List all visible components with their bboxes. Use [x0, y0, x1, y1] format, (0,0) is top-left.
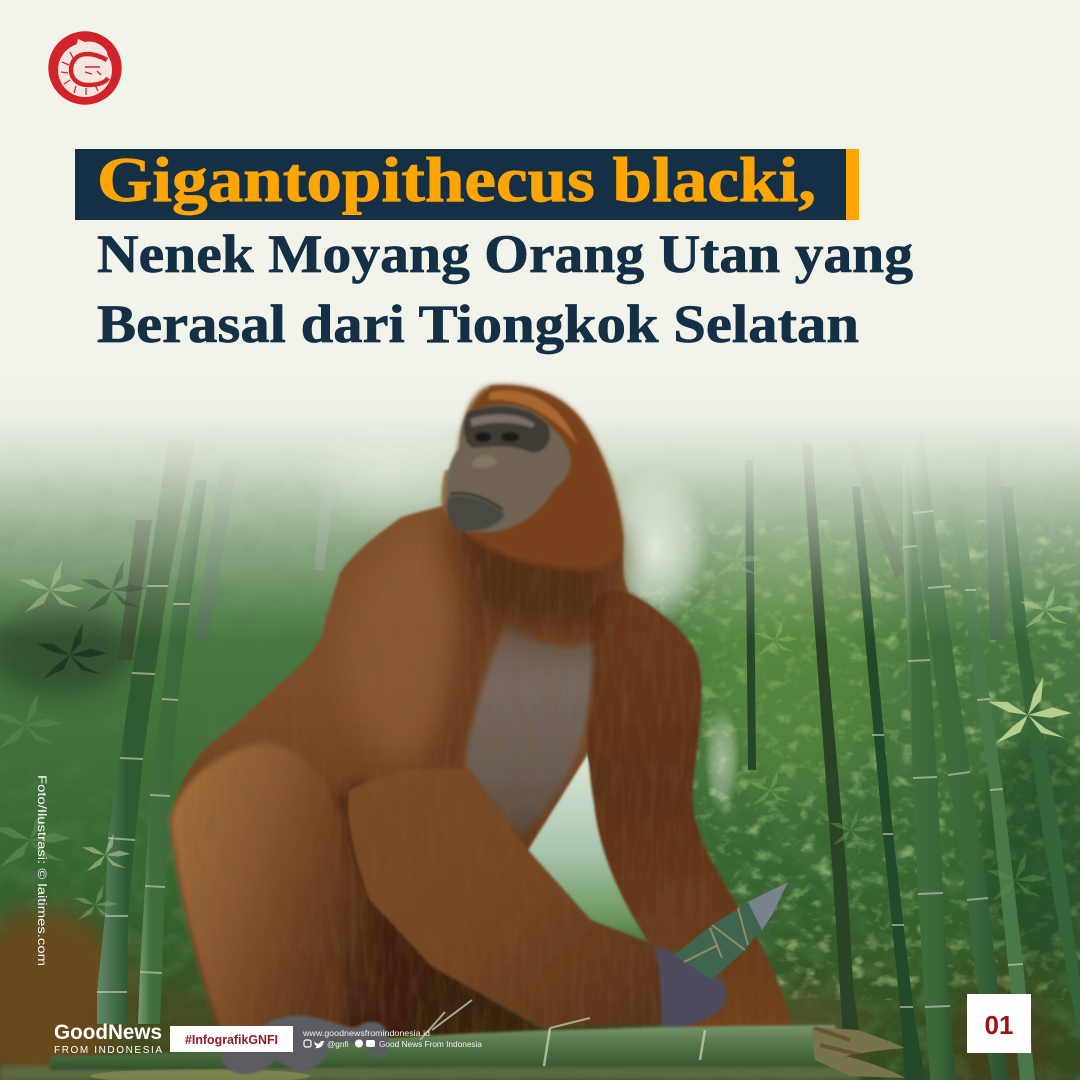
title: species name: Gigantopithecus blacki,: [97, 145, 816, 215]
brand: GoodNews From Indonesia: [54, 1021, 162, 1056]
icon: instagram: [304, 1040, 311, 1047]
ape foot: [222, 1016, 389, 1074]
ape body: [170, 385, 628, 1040]
ape hair fringe left of face: [441, 470, 470, 535]
logo ring: [58, 43, 112, 97]
ape head hair: [457, 385, 622, 570]
hashtag label: #InfografikGNFI: [185, 1032, 278, 1047]
horizontal bamboo and ground: [0, 1000, 905, 1080]
page number: [967, 994, 1031, 1053]
bamboo leaves: [0, 536, 1073, 920]
logo eagle head: [76, 39, 108, 59]
under-forearm shadow: [335, 780, 540, 1035]
photo credit: Foto/Ilustrasi: © laitimes.com: [35, 775, 49, 966]
forest background: [0, 380, 1080, 1080]
foreground bamboo stems: left: [97, 440, 207, 1024]
logo: GNFI garuda roundel: [48, 31, 122, 105]
logo letter G inner block: [80, 63, 106, 77]
icon: twitter: [314, 1041, 324, 1048]
ape neck shadow: [450, 513, 622, 640]
ape far arm: [587, 591, 792, 1028]
fur texture: [195, 386, 704, 1035]
icon: youtube: [366, 1040, 375, 1047]
subtitle line 2: Berasal dari Tiongkok Selatan: [97, 294, 859, 354]
top fog fade: [0, 375, 1080, 640]
website and social links: Good News From Indonesia: [379, 1039, 482, 1049]
foreground bamboo stems: right: [872, 430, 1080, 1080]
website and social links: www.goodnewsfromindonesia.id: [302, 1028, 430, 1038]
ape hand holding shoot: [654, 947, 727, 1028]
page number: 01: [985, 1010, 1013, 1040]
subtitle line 1: Nenek Moyang Orang Utan yang: [97, 224, 913, 284]
misty haze behind the figure: [305, 410, 740, 815]
brand: GoodNews From Indonesia: FROM INDONESIA: [54, 1045, 162, 1056]
logo letter G: [71, 54, 108, 85]
gap between arm and body: [520, 750, 655, 950]
title band: [75, 145, 859, 220]
illustration: Gigantopithecus ape: [150, 380, 810, 1050]
ape chest shadow: [430, 570, 505, 770]
ape chest: [465, 622, 592, 835]
ape face: [446, 405, 571, 532]
hashtag label: [170, 1026, 293, 1052]
logo ring texture: [61, 52, 98, 95]
background dark bamboo stems: [118, 440, 1005, 1080]
ape shoulder: [343, 530, 452, 760]
icon: facebook: [355, 1040, 363, 1048]
bamboo shoot: [674, 882, 788, 980]
website and social links: @gnfi: [327, 1040, 349, 1049]
website and social links: [302, 1028, 482, 1049]
ape forearm: [348, 768, 668, 1027]
brand: GoodNews From Indonesia: GoodNews: [54, 1021, 162, 1044]
ape thigh: [170, 743, 345, 1040]
